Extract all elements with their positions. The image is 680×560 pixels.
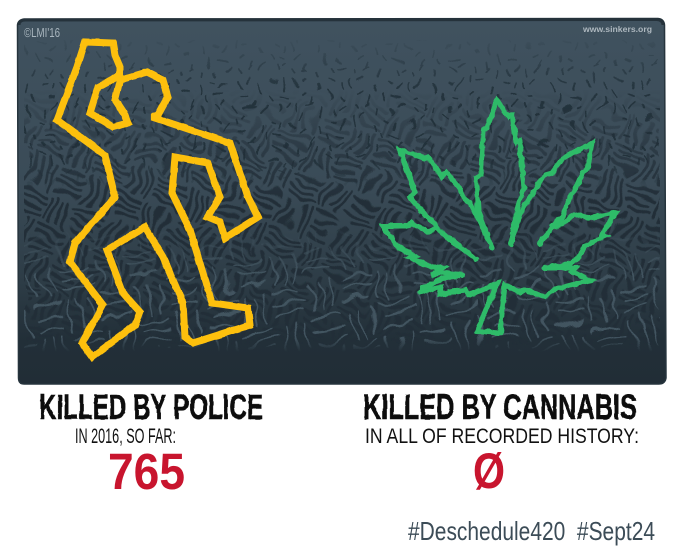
number: 765: 765 xyxy=(108,443,185,500)
subheading: in 2016, so far: IN 2016, SO FAR: xyxy=(75,425,176,448)
icon: yellow chalk body outline xyxy=(57,42,258,357)
panel: dark chalk background xyxy=(18,18,666,384)
number: zero: Ø xyxy=(473,443,505,499)
website credit: www.sinkers.org xyxy=(582,25,652,34)
heading: killed by police: KILLED BY POLICE xyxy=(39,388,263,427)
signature: ©LMI'16 xyxy=(24,25,60,40)
icon: green cannabis leaf outline xyxy=(383,100,615,333)
